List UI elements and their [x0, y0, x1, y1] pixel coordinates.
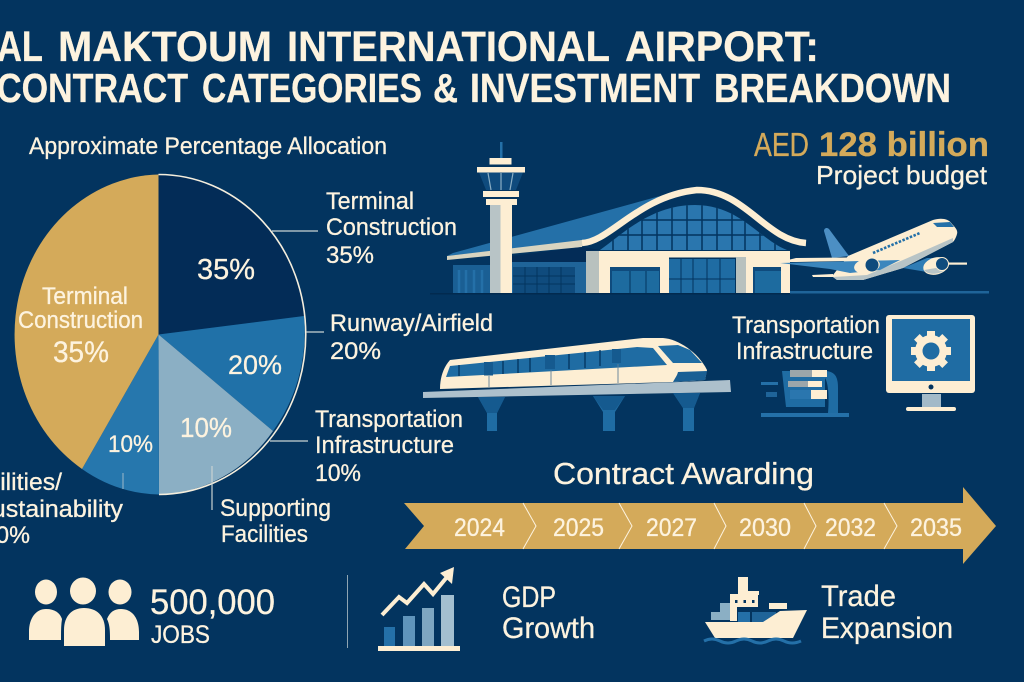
pie value: 10% light: 10% [180, 412, 232, 443]
label: transportation infrastructure: 10% [315, 460, 361, 487]
title [0, 23, 951, 111]
label: terminal construction: 35% [326, 242, 374, 269]
year: 2032: 2032 [825, 514, 876, 542]
icon: airport terminal [430, 142, 989, 294]
label: transportation infrastructure (right): Transportation [732, 312, 880, 339]
year: 2027: 2027 [646, 514, 697, 542]
label: supporting facilities [220, 495, 331, 548]
title: CONTRACT [0, 65, 188, 111]
title: AIRPORT: [625, 23, 819, 71]
label: terminal construction: Terminal [326, 188, 414, 215]
stat: GDP growth: Growth [502, 612, 595, 645]
pie label: terminal construction: Construction [18, 307, 143, 334]
title: BREAKDOWN [714, 65, 951, 111]
title: INVESTMENT [470, 65, 700, 111]
icon: machine [761, 370, 849, 417]
year: 2035: 2035 [910, 514, 962, 542]
label: transportation infrastructure (right) [732, 312, 880, 365]
pie label: terminal construction: 35% [53, 336, 109, 369]
budget callout: 128 billion [819, 126, 989, 164]
label: transportation infrastructure (right): Infrastructure [736, 338, 873, 365]
label: transportation infrastructure [315, 406, 463, 487]
pie label: terminal construction [18, 283, 143, 369]
label: runway/airfield: Runway/Airfield [330, 310, 493, 337]
label: runway/airfield: 20% [330, 338, 381, 365]
stat: GDP growth: GDP [502, 581, 556, 614]
icon: control tower [477, 142, 525, 293]
budget callout: AED [754, 126, 809, 163]
label: runway/airfield [330, 310, 493, 365]
chart subtitle: Approximate Percentage Allocation [29, 133, 387, 160]
pie label: terminal construction: Terminal [42, 283, 128, 310]
icon: train on viaduct [423, 338, 731, 431]
pie value: 20%: 20% [228, 350, 282, 380]
label: utilities/sustainability [0, 469, 123, 549]
label: transportation infrastructure: Transportation [315, 406, 463, 433]
icon: cargo ship [704, 577, 807, 643]
icon: monitor with gear [886, 315, 975, 411]
stat: 500,000 jobs: JOBS [151, 621, 210, 649]
title: & [433, 65, 458, 111]
year: 2024: 2024 [454, 514, 505, 542]
stat: 500,000 jobs [150, 583, 275, 649]
timeline heading: Contract Awarding [553, 456, 814, 491]
title: CATEGORIES [202, 65, 422, 111]
stat: GDP growth [502, 581, 595, 645]
label: terminal construction: Construction [326, 214, 457, 241]
stat: trade expansion [821, 580, 953, 645]
stat: trade expansion: Trade [821, 580, 896, 613]
year: 2025: 2025 [553, 514, 604, 542]
title: MAKTOUM [58, 23, 272, 71]
label: transportation infrastructure: Infrastructure [315, 432, 454, 459]
stat: trade expansion: Expansion [821, 612, 953, 645]
icon: airplane [780, 219, 967, 280]
label: supporting facilities: Facilities [221, 521, 308, 548]
pie value: 35%: 35% [197, 254, 255, 286]
stat: 500,000 jobs: 500,000 [150, 583, 275, 622]
year: 2030: 2030 [739, 514, 791, 542]
timeline arrow [404, 487, 996, 564]
budget callout: Project budget [816, 160, 988, 190]
icon: growth chart [378, 567, 460, 651]
icon: gear [903, 323, 959, 379]
title: INTERNATIONAL [287, 23, 610, 71]
pie value: 10% blue: 10% [108, 431, 153, 458]
label: terminal construction [326, 188, 457, 269]
icon: people [29, 578, 139, 646]
label: supporting facilities: Supporting [220, 495, 331, 522]
budget callout [754, 126, 989, 190]
pie chart [15, 174, 324, 510]
